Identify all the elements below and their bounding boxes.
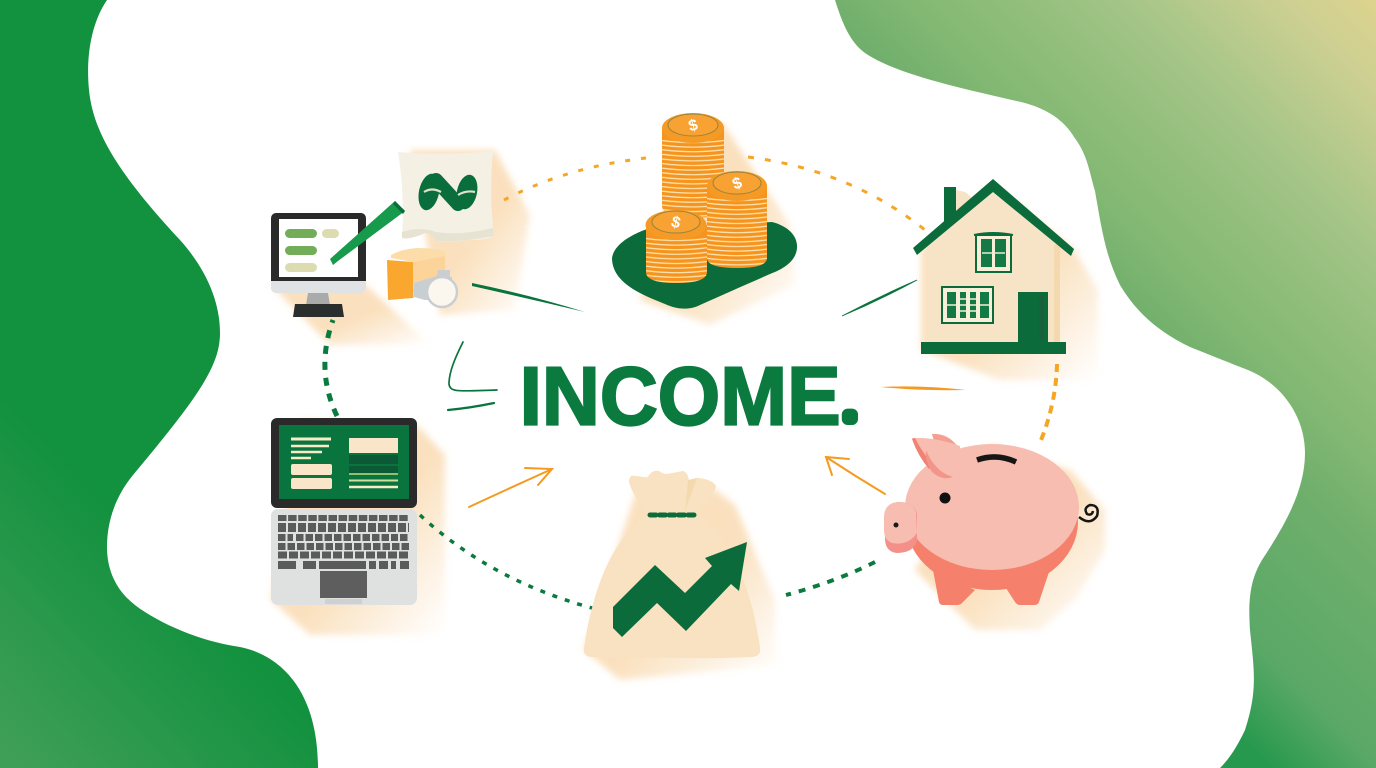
title: . xyxy=(846,393,854,426)
title: INCOME xyxy=(520,350,841,442)
icon: piggy bank xyxy=(884,434,1105,630)
central orange dashed and green dashed cycle ring xyxy=(325,157,1057,608)
accent: green scribble lines left of title xyxy=(448,342,497,410)
left green wave background xyxy=(0,0,318,768)
bag rope xyxy=(650,512,697,518)
lower window xyxy=(941,286,994,324)
icon: desktop monitor xyxy=(271,213,430,345)
camera xyxy=(414,270,452,300)
icon: money bag with rising arrow xyxy=(584,471,775,680)
pig body xyxy=(905,444,1079,570)
icon: orange box and camera xyxy=(387,248,457,307)
medium coin stack: $ xyxy=(730,174,745,193)
front ear xyxy=(912,438,960,472)
accent: green stroke toward title upper right xyxy=(842,280,917,316)
laptop screen content xyxy=(291,438,398,489)
snout xyxy=(884,502,917,553)
arrow: orange lower left toward title xyxy=(469,468,552,507)
icon: coin stacks on green plate xyxy=(612,113,797,325)
green plate xyxy=(612,222,797,309)
icon: cream sack with green symbol xyxy=(398,150,530,315)
accent: green stroke toward title upper left xyxy=(472,283,585,312)
tall coin stack xyxy=(662,113,724,218)
small coin stack: $ xyxy=(669,214,682,232)
right green wave background xyxy=(835,0,1376,768)
arrow: orange lower right toward title xyxy=(826,457,885,494)
upper window xyxy=(974,233,1013,273)
coin slot xyxy=(977,457,1016,462)
accent: orange stroke right of title xyxy=(881,386,966,390)
medium coin stack xyxy=(707,171,767,268)
legs xyxy=(933,570,975,605)
icon: green pencil xyxy=(330,201,405,265)
eye xyxy=(940,492,950,504)
rising zigzag arrow xyxy=(613,542,747,637)
pig belly xyxy=(906,454,1078,590)
small coin stack xyxy=(646,210,707,283)
icon: laptop xyxy=(271,418,445,635)
back ear xyxy=(932,434,958,447)
green symbol xyxy=(415,172,480,212)
keyboard xyxy=(278,518,409,565)
curly tail xyxy=(1079,505,1098,521)
tall coin stack: $ xyxy=(687,117,700,135)
icon: house xyxy=(913,179,1098,380)
door xyxy=(1018,292,1048,342)
